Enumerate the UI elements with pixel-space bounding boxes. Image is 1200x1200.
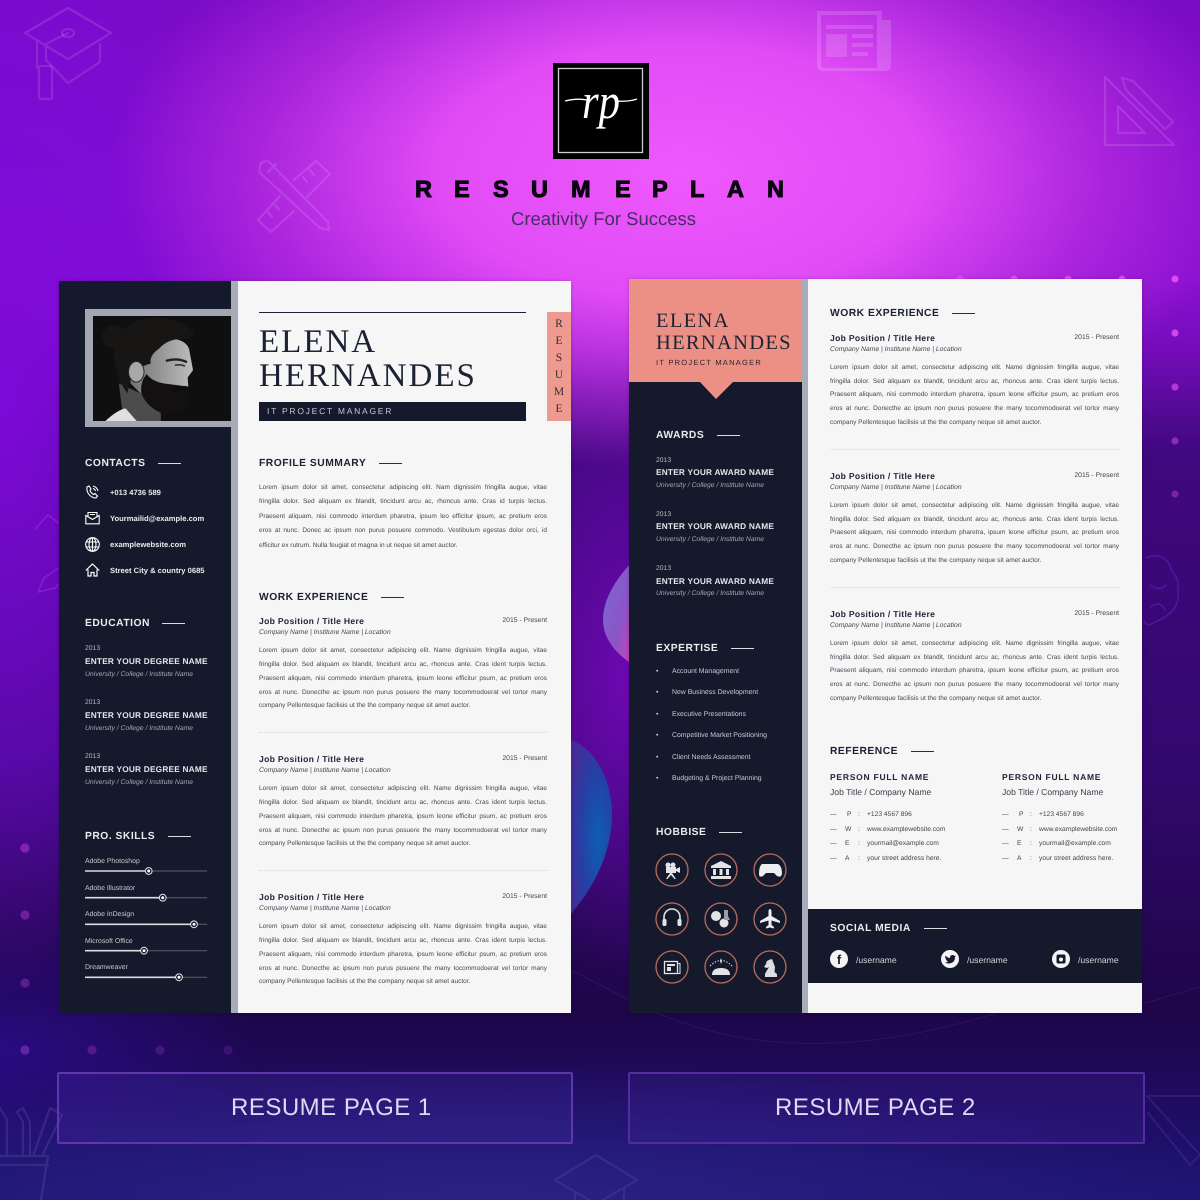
job entry 2, page 2: Lorem ipsum dolor sit amet, consectetur adipiscing elit. Name dignissim fringilla augue, vitae [830,502,1119,508]
reference section: yourmail@example.com [867,840,939,847]
job entry 1, page 1 [259,616,547,708]
education section: University / College / Institute Name [85,724,193,732]
job entry 3, page 2: Lorem ipsum dolor sit amet, consectetur adipiscing elit. Name dignissim fringilla augue, vitae [830,640,1119,646]
name heading, page 2: IT PROJECT MANAGER [656,358,762,367]
job entry 2, page 1: 2015 - Present [502,755,547,762]
reference section: — [830,854,837,862]
resume side tag: E [555,335,563,347]
reference section: yourmail@example.com [1039,840,1111,847]
pro skills section with sliders: Microsoft Office [85,938,133,944]
profile summary: Lorem ipsum dolor sit amet, consectetur adipiscing elit. Nam dignissim fringilla augue, vitae [259,484,547,490]
reference section: +123 4567 896 [867,811,912,818]
job entry 3, page 2: company Pellentesque facilisis ut the the company neque sit amet auctor. [830,694,1041,702]
job entry 2, page 2: 2015 - Present [1074,472,1119,479]
icon: dome and stars [710,958,732,975]
expertise section: Client Needs Assessment [672,754,751,760]
education section: EDUCATION [85,618,150,629]
portrait photo [85,309,231,427]
contacts section: CONTACTS [85,458,145,469]
button: resume page 2 [628,1072,1145,1144]
icon: twitter [941,950,959,968]
name heading: ELENA [259,324,377,360]
expertise section [656,643,767,782]
tagline: Creativity For Success [511,208,696,229]
social media section [830,922,1119,968]
reference section: P [1019,811,1023,818]
panel: resume page 2 [629,279,1142,1013]
reference section: : [858,854,860,862]
work experience heading, page 1: WORK EXPERIENCE [259,592,368,602]
profile summary: efficitur ex rutrum. Nulla feugiat et magna in ut neque sit amet auctor. [259,542,458,548]
education section: ENTER YOUR DEGREE NAME [85,656,208,666]
job entry 2, page 1: Job Position / Title Here [259,754,364,764]
awards section: AWARDS [656,430,704,441]
social media section: /username [1078,955,1119,965]
job entry 1, page 2: 2015 - Present [1074,334,1119,341]
reference section: — [1002,826,1009,832]
job entry 2, page 2: Praesent aliquam, nisi commodo interdum pharetra, ipsum leone efficitur psum, ac pretium eros [830,528,1119,536]
education section: University / College / Institute Name [85,670,193,678]
resume side tag: U [555,369,563,381]
resume side tag: R [555,318,563,330]
work experience heading, page 2: WORK EXPERIENCE [830,308,939,318]
hobbies section: HOBBISE [656,826,706,838]
job entry 2, page 1: company Pellentesque facilisis ut the the company neque sit amet auctor. [259,840,470,846]
reference section: : [858,826,860,832]
logo [553,63,649,159]
profile summary: Praesent aliquam, nisi commodo interdum pharetra, ipsum leo efficitur ipsum, ac pretium eros [259,512,547,520]
icon: small pencil ruler at left [35,515,60,592]
job entry 2, page 2: eros at nunc. Donecthe ac ipsum non purus posuere the many tocommodoerat vel tortor many [830,542,1119,550]
job entry 3, page 2 [830,608,1119,702]
resume side tag [547,312,571,421]
awards section: University / College / Institute Name [656,536,764,542]
reference section: — [830,840,837,847]
profile summary: fringilla dolor. Sed aliquam ex blandit, tincidunt arcu ac, rhoncus ante. Cras id turpis lectus. [259,498,547,504]
reference section: P [847,811,851,818]
job entry 2, page 2: company Pellentesque facilisis ut the the company neque sit amet auctor. [830,556,1041,564]
job entry 2, page 1 [259,754,547,846]
hobbies section [655,826,787,984]
icon: newspaper [817,11,891,71]
expertise section: • [656,754,658,760]
reference section: : [1030,840,1032,847]
job entry 3, page 2: Praesent aliquam, nisi commodo interdum pharetra, ipsum leone efficitur psum, ac pretium eros [830,666,1119,674]
job entry 1, page 1: 2015 - Present [502,617,547,624]
icon: mail [85,512,100,524]
icon: museum [711,861,731,879]
icon: set square and pencil [1105,77,1174,145]
profile summary: FROFILE SUMMARY [259,458,366,469]
reference section: W [1017,826,1023,832]
expertise section: Competitive Market Positioning [672,732,767,739]
job entry 3, page 1: company Pellentesque facilisis ut the the company neque sit amet auctor. [259,978,470,984]
reference section: PERSON FULL NAME [1002,772,1101,782]
reference section: +123 4567 896 [1039,811,1084,818]
job entry 1, page 1: fringilla dolor. Sed aliquam ex blandit, tincidunt arcu ac, rhoncus ante. Cras ident turpis lectus. [259,660,547,668]
resume side tag: M [554,386,564,398]
reference section: : [858,840,860,847]
social media section: /username [856,955,897,965]
job entry 3, page 1: fringilla dolor. Sed aliquam ex blandit, tincidunt arcu ac, rhoncus ante. Cras ident turpis lectus. [259,936,547,944]
job entry 2, page 1: fringilla dolor. Sed aliquam ex blandit, tincidunt arcu ac, rhoncus ante. Cras ident turpis lectus. [259,798,547,806]
job entry 1, page 2: Job Position / Title Here [830,332,935,342]
expertise section: New Business Development [672,689,758,696]
reference section: — [830,826,837,832]
reference section: PERSON FULL NAME [830,772,929,782]
awards section [656,430,774,597]
icon: spheres [711,910,730,928]
logo: rp [582,73,620,129]
icon: brain [1144,556,1178,624]
expertise section: Account Management [672,668,739,674]
button: resume page 2: RESUME PAGE 2 [775,1094,976,1121]
resume side tag: E [555,403,563,415]
education section: ENTER YOUR DEGREE NAME [85,710,208,720]
reference section: your street address here. [867,854,941,862]
reference section: A [1017,854,1021,862]
icon: pen cup [0,1108,62,1200]
pro skills section with sliders [85,831,207,982]
profile summary: eros at nunc. Donec ac ipsum non purus posuere commodo. Vestibulum egestas dolor orci, id [259,526,547,534]
expertise section: • [656,710,658,718]
brand name: RESUMEPLAN [415,176,784,202]
reference section: REFERENCE [830,746,898,756]
icon: home [85,563,100,577]
expertise section: • [656,668,658,674]
reference section: Job Title / Company Name [1002,787,1103,797]
contacts section: +013 4736 589 [110,488,161,496]
icon: graduation cap [25,8,111,99]
icon: instagram [1052,950,1070,968]
name heading, page 2 [656,310,792,367]
icon: gamepad [759,864,782,877]
job entry 1, page 1: Lorem ipsum dolor sit amet, consectetur adipiscing elit. Name dignissim fringilla augue, vitae [259,646,547,654]
job entry 1, page 2 [830,332,1119,426]
job title bar: IT PROJECT MANAGER [267,406,393,416]
education section: 2013 [85,698,100,706]
reference section: E [1017,840,1021,847]
button: resume page 1: RESUME PAGE 1 [231,1094,432,1121]
reference section [830,746,1117,862]
reference section: : [1030,854,1032,862]
job entry 3, page 1: Lorem ipsum dolor sit amet, consectetur adipiscing elit. Name dignissim fringilla augue, vitae [259,922,547,930]
reference section: — [1002,811,1009,818]
icon: airplane [760,909,780,928]
job entry 2, page 1: Lorem ipsum dolor sit amet, consectetur adipiscing elit. Name dignissim fringilla augue, vitae [259,784,547,792]
job entry 2, page 2: Company Name | Institune Name | Location [830,484,962,490]
contacts section [85,458,205,577]
job entry 3, page 1: Praesent aliquam, nisi commodo interdum pharetra, ipsum leone efficitur psum, ac pretium eros [259,950,547,958]
expertise section: • [656,689,658,696]
reference section: : [858,811,860,818]
text: HERNANDES [259,358,477,394]
pro skills section with sliders: Adobe Photoshop [85,858,140,865]
pink name header [629,279,802,399]
icon: newspaper [664,962,680,974]
job entry 3, page 1: 2015 - Present [502,893,547,900]
icon: movie camera [666,862,680,879]
expertise section: Executive Presentations [672,710,746,718]
icon: globe [85,537,100,552]
reference section: W [845,826,851,832]
pro skills section with sliders: Dreamweaver [85,964,128,971]
job entry 2, page 2: Job Position / Title Here [830,470,935,480]
education section: University / College / Institute Name [85,778,193,786]
job entry 1, page 2: eros at nunc. Donecthe ac ipsum non purus posuere the many tocommodoerat vel tortor many [830,404,1119,412]
expertise section: EXPERTISE [656,643,718,654]
job entry 3, page 1 [259,892,547,984]
reference section: A [845,854,849,862]
icon: headphones [662,909,682,926]
social media section: /username [967,955,1008,965]
job entry 1, page 1: Praesent aliquam, nisi commodo interdum pharetra, ipsum leone efficitur psum, ac pretium eros [259,674,547,682]
reference section: : [1030,826,1032,832]
icon: pencil and ruler cross [258,161,330,232]
job entry 1, page 2: fringilla dolor. Sed aliquam ex blandit, tincidunt arcu ac, rhoncus ante. Cras ident turpis lectus. [830,378,1119,384]
contacts section: Yourmailid@example.com [110,514,204,522]
job entry 1, page 2: Company Name | Institune Name | Location [830,346,962,352]
job entry 1, page 1: eros at nunc. Donecthe ac ipsum non purus posuere the many tocommodoerat vel tortor many [259,688,547,696]
job entry 1, page 2: Praesent aliquam, nisi commodo interdum pharetra, ipsum leone efficitur psum, ac pretium eros [830,390,1119,398]
pro skills section with sliders: PRO. SKILLS [85,831,155,842]
reference section: — [830,811,837,818]
job entry 3, page 2: fringilla dolor. Sed aliquam ex blandit, tincidunt arcu ac, rhoncus ante. Cras ident turpis lectus. [830,654,1119,660]
job entry 3, page 2: eros at nunc. Donecthe ac ipsum non purus posuere the many tocommodoerat vel tortor many [830,680,1119,688]
icon: chess knight [764,959,777,977]
awards section: University / College / Institute Name [656,590,764,597]
education section: 2013 [85,752,100,760]
icon: phone [86,485,98,498]
job entry 3, page 1: Job Position / Title Here [259,892,364,902]
reference section: www.examplewebsite.com [1039,826,1117,832]
awards section: ENTER YOUR AWARD NAME [656,576,774,586]
job entry 1, page 1: Job Position / Title Here [259,616,364,626]
reference section: : [1030,811,1032,818]
pro skills section with sliders: Adobe InDesign [85,911,134,918]
job entry 1, page 2: company Pellentesque facilisis ut the the company neque sit amet auctor. [830,418,1041,426]
job entry 1, page 1: company Pellentesque facilisis ut the the company neque sit amet auctor. [259,702,470,708]
contacts section: Street City & country 0685 [110,566,205,574]
expertise section: • [656,732,658,739]
expertise section: • [656,775,658,782]
reference section: — [1002,840,1009,847]
icon: bottom-right set square [1147,1096,1200,1165]
education section: 2013 [85,644,100,652]
education section [85,618,208,786]
job entry 2, page 1: Company Name | Institune Name | Location [259,766,391,774]
job entry 2, page 1: eros at nunc. Donecthe ac ipsum non purus posuere the many tocommodoerat vel tortor many [259,826,547,834]
job entry 3, page 2: Job Position / Title Here [830,608,935,618]
profile summary [259,458,547,548]
job entry 3, page 1: Company Name | Institune Name | Location [259,904,391,912]
contacts section: examplewebsite.com [110,540,186,548]
name heading, page 2: ELENA [656,310,730,332]
social media section: SOCIAL MEDIA [830,922,911,934]
education section: ENTER YOUR DEGREE NAME [85,764,208,774]
reference section: Job Title / Company Name [830,787,931,797]
job entry 3, page 1: eros at nunc. Donecthe ac ipsum non purus posuere the many tocommodoerat vel tortor many [259,964,547,972]
reference section: — [1002,854,1009,862]
awards section: 2013 [656,456,671,464]
job entry 1, page 1: Company Name | Institune Name | Location [259,628,391,636]
panel: resume page 1 [59,281,571,1013]
reference section: E [845,840,849,847]
job entry 3, page 2: Company Name | Institune Name | Location [830,622,962,628]
pro skills section with sliders: Adobe Illustrator [85,884,135,892]
job entry 2, page 1: Praesent aliquam, nisi commodo interdum pharetra, ipsum leone efficitur psum, ac pretium eros [259,812,547,820]
awards section: ENTER YOUR AWARD NAME [656,467,774,477]
icon: facebook: f [837,952,841,967]
icon: facebook [830,950,848,968]
reference section: www.examplewebsite.com [867,826,945,832]
awards section: 2013 [656,564,671,572]
awards section: University / College / Institute Name [656,482,764,488]
job entry 2, page 2 [830,470,1119,564]
button: resume page 1 [57,1072,573,1144]
awards section: ENTER YOUR AWARD NAME [656,521,774,531]
job entry 2, page 2: fringilla dolor. Sed aliquam ex blandit, tincidunt arcu ac, rhoncus ante. Cras ident turpis lectus. [830,516,1119,522]
icon: bottom graduation cap [555,1155,637,1200]
awards section: 2013 [656,510,671,518]
reference section: your street address here. [1039,854,1113,862]
job entry 1, page 2: Lorem ipsum dolor sit amet, consectetur adipiscing elit. Name dignissim fringilla augue, vitae [830,364,1119,370]
resume side tag: S [556,352,562,364]
expertise section: Budgeting & Project Planning [672,775,762,782]
job entry 3, page 2: 2015 - Present [1074,610,1119,617]
name heading, page 2: HERNANDES [656,332,792,354]
job title bar [259,402,526,421]
